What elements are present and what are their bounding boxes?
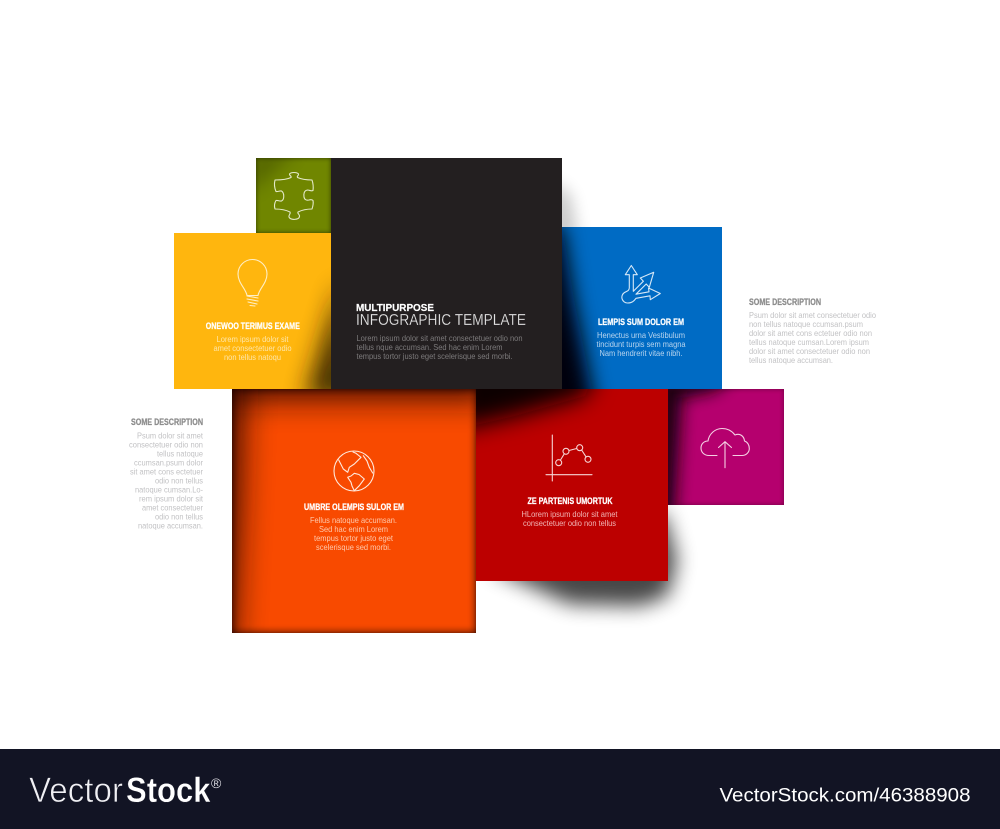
side note: left description: ccumsan.psum dolor xyxy=(134,458,203,468)
text block: blue: Henectus urna Vestibulum xyxy=(597,330,685,340)
side note: left description xyxy=(129,417,204,530)
side note: right description: tellus natoque cumsan.Lorem ipsum xyxy=(749,337,869,347)
text block: orange: Sed hac enim Lorem xyxy=(319,524,388,534)
title: INFOGRAPHIC TEMPLATE xyxy=(356,312,526,329)
side note: right description: non tellus natoque ccumsan.psum xyxy=(749,319,863,329)
side note: left description: tellus natoque xyxy=(157,448,203,458)
side note: right description: dolor sit amet cons ectetuer odio non xyxy=(749,328,872,338)
panel: red chart xyxy=(476,389,668,581)
title xyxy=(356,302,526,329)
side note: right description: Psum dolor sit amet consectetuer odio xyxy=(749,310,876,320)
text block: yellow xyxy=(214,334,292,362)
side note: left description: amet consectetuer xyxy=(142,502,203,512)
side note: right description xyxy=(749,297,876,365)
heading: orange: UMBRE OLEMPIS SULOR EM xyxy=(304,502,404,512)
icon: branching arrows xyxy=(622,266,660,303)
side note: right description: dolor sit amet consectetuer odio non xyxy=(749,346,870,356)
side note: left description: natoque cumsan.Lo- xyxy=(135,484,203,494)
side note: left description: rem ipsum dolor sit xyxy=(139,494,204,504)
text block: orange: Fellus natoque accumsan. xyxy=(310,515,397,525)
side note: right description: SOME DESCRIPTION xyxy=(749,297,821,307)
text block: blue: Nam hendrerit vitae nibh. xyxy=(600,348,682,358)
panel: dark main xyxy=(331,158,562,389)
panel: green puzzle xyxy=(256,158,331,233)
text block: red xyxy=(522,509,618,528)
side note: left description: odio non tellus xyxy=(155,476,203,486)
text block: red: consectetuer odio non tellus xyxy=(523,518,616,528)
footer url: VectorStock.com/46388908 xyxy=(720,784,970,806)
side note: right description: tellus natoque accumsan. xyxy=(749,355,833,365)
side note: left description: odio non tellus xyxy=(155,512,203,522)
footer logo: Stock xyxy=(126,771,211,810)
footer logo: ® xyxy=(211,775,222,791)
shadow: dark panel on white xyxy=(562,181,583,227)
icon: cloud upload xyxy=(701,428,749,468)
footer bar xyxy=(0,749,1000,829)
side note: left description: consectetuer odio non xyxy=(129,440,203,450)
text block: yellow: amet consectetuer odio xyxy=(214,343,292,353)
panel: yellow idea xyxy=(174,233,331,389)
text block: red: HLorem ipsum dolor sit amet xyxy=(522,509,618,519)
heading: blue: LEMPIS SUM DOLOR EM xyxy=(598,317,684,327)
heading: yellow: ONEWOO TERIMUS EXAME xyxy=(206,321,300,331)
side note: left description: sit amet cons ectetuer xyxy=(130,466,203,476)
icon: light bulb xyxy=(238,260,267,306)
side note: left description: Psum dolor sit amet xyxy=(137,430,204,440)
title: MULTIPURPOSE xyxy=(356,302,434,314)
heading: red: ZE PARTENIS UMORTUK xyxy=(528,496,613,506)
panel: orange globe xyxy=(232,389,476,633)
shadow: red panel on white xyxy=(490,512,677,606)
text block: blue xyxy=(596,330,686,358)
icon: line chart xyxy=(546,435,592,481)
text block: yellow: non tellus natoqu xyxy=(224,352,281,362)
icon: globe xyxy=(334,451,374,491)
text block: main description: tellus nque accumsan. Sed hac enim Lorem xyxy=(356,342,502,352)
text block: orange xyxy=(310,515,397,552)
footer logo xyxy=(29,771,222,810)
text block: orange: scelerisque sed morbi. xyxy=(316,542,391,552)
footer logo: Vector xyxy=(29,771,123,810)
text block: main description xyxy=(356,333,523,361)
text block: orange: tempus tortor justo eget xyxy=(314,533,394,543)
side note: left description: SOME DESCRIPTION xyxy=(131,417,203,427)
text block: main description: Lorem ipsum dolor sit amet consectetuer odio non xyxy=(356,333,523,343)
text block: blue: tincidunt turpis sem magna xyxy=(596,339,686,349)
text block: yellow: Lorem ipsum dolor sit xyxy=(216,334,289,344)
icon: puzzle piece xyxy=(274,172,313,219)
panel: blue xyxy=(562,227,722,389)
text block: main description: tempus tortor justo eget scelerisque sed morbi. xyxy=(356,351,512,361)
panel: magenta cloud xyxy=(668,389,784,505)
side note: left description: natoque accumsan. xyxy=(138,520,203,530)
